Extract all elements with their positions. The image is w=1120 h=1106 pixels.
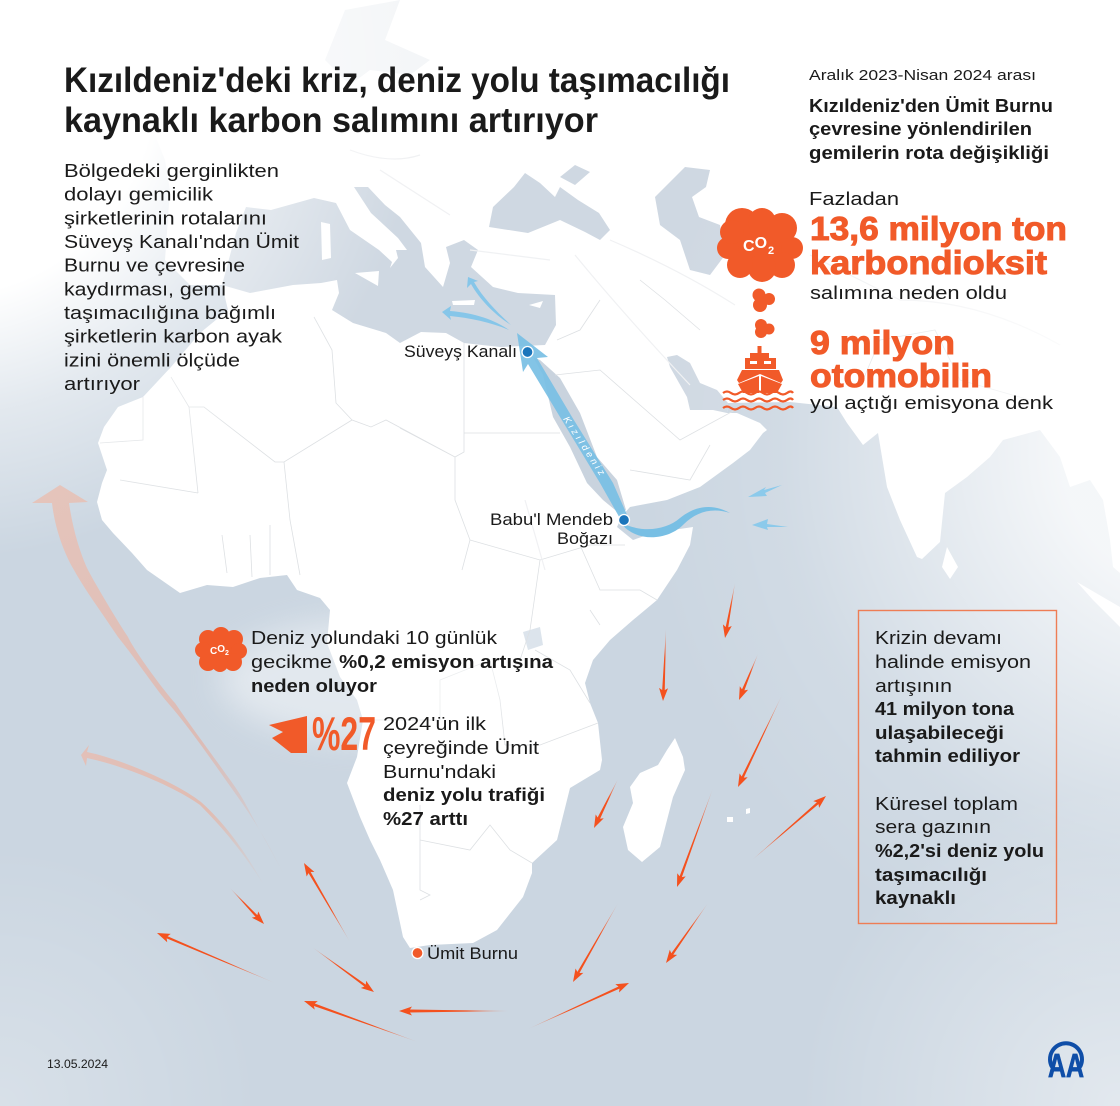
title: Kızıldeniz'deki kriz, deniz yolu taşımacılığı <box>64 61 730 100</box>
panel: forecast box: %2,2'si deniz yolu <box>875 840 1044 861</box>
icon: small smoke puffs <box>752 288 775 338</box>
title: kaynaklı karbon salımını artırıyor <box>64 101 598 140</box>
map labels: Boğazı <box>557 530 613 548</box>
intro paragraph: izini önemli ölçüde <box>64 349 240 370</box>
intro paragraph: taşımacılığına bağımlı <box>64 302 276 323</box>
callout: traffic increase: deniz yolu trafiği <box>383 784 545 805</box>
blue curved arrow into the Gulf of Aden <box>620 507 730 537</box>
intro paragraph: şirketlerin karbon ayak <box>64 326 283 347</box>
panel: forecast box: sera gazının <box>875 816 991 837</box>
route change subheading: çevresine yönlendirilen <box>809 118 1032 139</box>
icon: large CO2 cloud: C <box>743 238 755 255</box>
glow behind stats text <box>220 620 520 740</box>
icon: small CO2 cloud: O <box>217 644 225 655</box>
sea: Caspian <box>655 167 725 275</box>
callout: traffic increase: 2024'ün ilk <box>383 713 487 734</box>
icon: large CO2 cloud: 2 <box>768 245 774 257</box>
lakes <box>523 627 543 650</box>
intro paragraph: artırıyor <box>64 373 140 394</box>
stat: 9 million cars <box>810 324 1054 413</box>
callout: 10 day delay: %0,2 emisyon artışına <box>339 651 554 672</box>
callout: 10 day delay: neden oluyor <box>251 675 377 696</box>
faint Baltic and North Seas <box>325 0 430 85</box>
stat: 13.6 million tons: 13,6 milyon ton <box>810 210 1067 247</box>
dot: Suez Canal <box>522 346 533 358</box>
land: Africa, Arabia, Eurasia <box>97 0 1120 948</box>
route change subheading <box>809 95 1053 163</box>
icon: orange arrow to the West <box>269 716 307 753</box>
title <box>64 61 730 140</box>
intro paragraph: Bölgedeki gerginlikten <box>64 160 279 181</box>
faded route arrows toward Atlantic <box>32 485 285 887</box>
panel: forecast box: Küresel toplam <box>875 793 1018 814</box>
intro paragraph: Süveyş Kanalı'ndan Ümit <box>64 231 299 252</box>
dot: Cape of Good Hope <box>412 948 423 958</box>
panel: forecast box: halinde emisyon <box>875 651 1031 672</box>
map labels: Babu'l Mendeb <box>490 511 613 529</box>
icon: small CO2 cloud: C <box>210 646 217 657</box>
callout: traffic increase: çeyreğinde Ümit <box>383 737 539 758</box>
callout: traffic increase: Burnu'ndaki <box>383 761 496 782</box>
date: 13.05.2024 <box>47 1059 109 1071</box>
icon: large CO2 cloud: O <box>755 235 767 252</box>
stat: 13.6 million tons: Fazladan <box>809 188 899 209</box>
panel: forecast box: 41 milyon tona <box>875 698 1015 719</box>
stat: 27 percent: %27 <box>312 707 376 760</box>
callout: traffic increase <box>383 713 545 829</box>
blue arrow: Bab-el-Mandeb to Suez <box>517 333 628 522</box>
panel: forecast box: tahmin ediliyor <box>875 745 1020 766</box>
borders <box>100 280 1030 900</box>
intro paragraph: Burnu ve çevresine <box>64 255 245 276</box>
stat: 13.6 million tons <box>809 188 1067 303</box>
intro paragraph: kaydırması, gemi <box>64 278 226 299</box>
callout: traffic increase: %27 arttı <box>383 808 468 829</box>
stat: 9 million cars: yol açtığı emisyona denk <box>810 392 1054 413</box>
period label: Aralık 2023-Nisan 2024 arası <box>809 67 1036 84</box>
callout: 10 day delay: gecikme <box>251 651 332 672</box>
terrain texture <box>350 150 1060 570</box>
intro paragraph: dolayı gemicilik <box>64 184 214 205</box>
small blue arrows in the Indian Ocean <box>748 485 788 530</box>
intro paragraph: şirketlerinin rotalarını <box>64 207 267 228</box>
icon: small CO2 cloud <box>195 627 247 672</box>
panel: forecast box: kaynaklı <box>875 887 956 908</box>
icon: small CO2 cloud: 2 <box>225 650 229 657</box>
stat: 9 million cars: otomobilin <box>810 357 992 394</box>
sea: Red Sea <box>533 357 626 514</box>
panel: forecast box: artışının <box>875 675 952 696</box>
sea: Persian Gulf <box>667 355 728 413</box>
dot: Bab-el-Mandeb <box>618 514 630 526</box>
icon: ship on waves <box>723 346 793 410</box>
panel: forecast box: taşımacılığı <box>875 864 987 885</box>
blue arrows in the Mediterranean <box>442 277 511 330</box>
panel: forecast box: ulaşabileceği <box>875 722 1004 743</box>
route change subheading: Kızıldeniz'den Ümit Burnu <box>809 95 1053 116</box>
route change subheading: gemilerin rota değişikliği <box>809 142 1049 163</box>
sea: Black Sea and Azov <box>489 165 610 240</box>
stat: 13.6 million tons: salımına neden oldu <box>810 282 1007 303</box>
icon: large CO2 cloud <box>717 208 803 282</box>
stat: 13.6 million tons: karbondioksit <box>810 244 1047 281</box>
logo: AA: AA <box>1048 1047 1084 1084</box>
intro paragraph <box>64 160 299 394</box>
callout: 10 day delay: Deniz yolundaki 10 günlük <box>251 627 498 648</box>
island: Madagascar and Indian Ocean islands <box>623 547 1120 862</box>
map labels <box>404 343 613 963</box>
islands in the Mediterranean <box>321 222 543 308</box>
panel: forecast box: Krizin devamı <box>875 627 1002 648</box>
sea: Mediterranean <box>222 187 556 347</box>
callout: 10 day delay <box>251 627 554 696</box>
stat: 9 million cars: 9 milyon <box>810 324 955 361</box>
panel: forecast box <box>858 610 1056 924</box>
map labels: Süveyş Kanalı <box>404 343 517 361</box>
map labels: Ümit Burnu <box>427 945 518 963</box>
Kızıldeniz label on arrow: Kızıldeniz <box>560 415 607 478</box>
orange ship traffic arrows <box>155 582 829 1046</box>
